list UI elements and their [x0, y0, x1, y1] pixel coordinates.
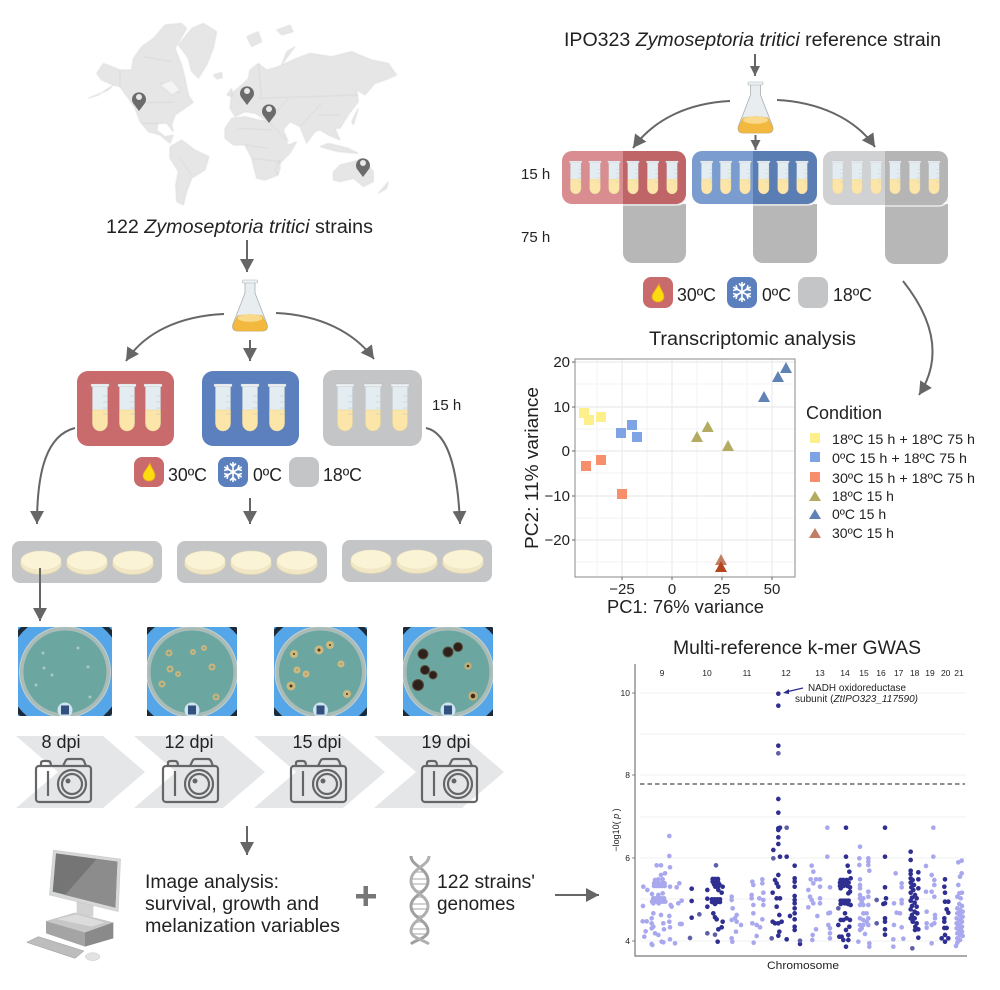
points: orange squares — [581, 455, 627, 499]
points: odd chromosomes — [643, 694, 963, 948]
chart: Manhattan plot: 19 — [925, 668, 935, 678]
chart: PCA scatter: 50 — [764, 581, 780, 598]
legend: PCA conditions: 0ºC 15 h + 18ºC 75 h — [832, 450, 967, 466]
legend: left temperatures — [134, 457, 362, 487]
arrow: reference to flask — [754, 54, 756, 76]
chart: PCA scatter: 10 — [553, 399, 570, 416]
text: image analysis: Image analysis: — [145, 872, 279, 893]
chart: PCA scatter: 25 — [714, 581, 730, 598]
chart: PCA scatter: 20 — [553, 354, 570, 371]
text: genomes — [437, 872, 535, 915]
axis label: chromosome: Chromosome — [767, 960, 839, 972]
panel: plate trays — [12, 540, 492, 583]
legend: right temperatures — [643, 277, 872, 308]
arrows: flask to conditions — [126, 313, 374, 361]
points: yellow squares — [579, 408, 606, 425]
chart: Manhattan plot: 20 — [941, 668, 951, 678]
chart: Manhattan plot: 4 — [625, 936, 630, 946]
icon: DNA helix — [411, 856, 429, 944]
labels: time points — [521, 166, 550, 246]
chart: PCA scatter: 0 — [562, 443, 570, 460]
icon: desktop computer — [27, 850, 121, 961]
panel: 18C time course — [823, 151, 948, 264]
heading: GWAS: Multi-reference k-mer GWAS — [673, 638, 921, 659]
legend: left temperatures: 30ºC — [168, 465, 207, 485]
photo: 8 dpi plate — [18, 627, 112, 716]
text: image analysis: melanization variables — [145, 916, 340, 937]
icon: right flask — [738, 82, 773, 133]
world map — [88, 23, 397, 205]
photo: 19 dpi plate — [403, 627, 493, 716]
label: 15 h: 15 h — [432, 397, 461, 414]
text: genomes: 122 strains' — [437, 872, 535, 893]
chart: Manhattan plot: 10 — [621, 688, 630, 698]
heading: transcriptomic analysis: Transcriptomic analysis — [649, 329, 856, 350]
legend: right temperatures: 30ºC — [677, 285, 716, 305]
legend: right temperatures: 18ºC — [833, 285, 872, 305]
photo: 15 dpi plate — [274, 627, 367, 716]
chart: Manhattan plot: 9 — [660, 668, 665, 678]
chart: PCA scatter — [545, 354, 795, 598]
points: olive triangles — [691, 421, 734, 451]
heading: reference strain: IPO323 Zymoseptoria tritici reference strain — [564, 30, 941, 51]
chart: Manhattan plot: 10 — [702, 668, 712, 678]
legend: left temperatures: 18ºC — [323, 465, 362, 485]
timeline chevrons — [16, 736, 504, 808]
chart: PCA scatter: −25 — [609, 581, 635, 598]
text: image analysis: survival, growth and — [145, 894, 319, 915]
chart: Manhattan plot: 12 — [781, 668, 791, 678]
timepoint labels — [41, 732, 471, 752]
chart: Manhattan plot: 11 — [743, 668, 752, 678]
icon: left flask — [233, 280, 267, 331]
legend: PCA conditions: 18ºC 15 h — [832, 488, 894, 504]
panel: 30C tubes — [77, 371, 174, 446]
chart: Manhattan plot: 13 — [815, 668, 825, 678]
panel: 0C tubes — [202, 371, 299, 446]
chart: PCA scatter: −20 — [545, 532, 570, 549]
heading: 122 strains: 122 Zymoseptoria tritici strains — [106, 217, 373, 238]
chart: Manhattan plot: 14 — [840, 668, 850, 678]
chart: Manhattan plot: 6 — [625, 853, 630, 863]
map pins — [132, 86, 370, 177]
arrows: right flask to conditions — [633, 100, 875, 150]
annotation: NADH oxidoreductase: subunit (ZtIPO323_117590) — [795, 694, 918, 705]
legend: PCA conditions: 18ºC 15 h + 18ºC 75 h — [832, 431, 975, 447]
chart: Manhattan plot: 16 — [876, 668, 886, 678]
annotation: NADH oxidoreductase — [783, 683, 918, 705]
chart: Manhattan plot: 8 — [625, 770, 630, 780]
chart: Manhattan plot: 18 — [910, 668, 920, 678]
legend: left temperatures: 0ºC — [253, 465, 282, 485]
legend: PCA conditions: 30ºC 15 h + 18ºC 75 h — [832, 470, 975, 486]
panel: 0C time course — [692, 151, 817, 263]
legend: PCA conditions: 30ºC 15 h — [832, 525, 894, 541]
photo: 12 dpi plate — [147, 627, 237, 716]
axis label: log10 p: −log10( p ) — [611, 808, 621, 852]
text: genomes: genomes — [437, 894, 515, 915]
labels: time points: 75 h — [521, 229, 550, 246]
timepoint labels: 12 dpi — [164, 732, 214, 752]
text: image analysis — [145, 872, 340, 937]
points: blue squares — [616, 420, 642, 442]
timepoint labels: 19 dpi — [421, 732, 471, 752]
timepoint labels: 8 dpi — [41, 732, 81, 752]
panel: 18C tubes — [323, 370, 422, 446]
legend: PCA conditions: Condition — [806, 403, 882, 423]
panel: 30C time course — [562, 151, 686, 263]
arrow: photos to analysis — [246, 826, 248, 855]
icons: cameras — [36, 759, 477, 802]
arrow: analysis to GWAS — [555, 894, 599, 896]
legend: right temperatures: 0ºC — [762, 285, 791, 305]
arrows: conditions to plates — [37, 428, 460, 524]
chart: Manhattan plot: 17 — [894, 668, 904, 678]
chart: PCA scatter: −10 — [545, 488, 570, 505]
arrow: plate to photos — [39, 568, 41, 621]
axis title: PC2: PC2: 11% variance — [522, 387, 542, 549]
labels: time points: 15 h — [521, 166, 550, 183]
chart: Manhattan plot — [611, 664, 967, 972]
arrow: strains to flask — [246, 240, 248, 272]
chart: PCA scatter: 0 — [668, 581, 676, 598]
points: red triangles — [715, 554, 727, 572]
legend: PCA conditions — [806, 403, 975, 541]
arrow: conditions to PCA — [903, 281, 932, 395]
icon: plus — [356, 886, 376, 906]
annotation: NADH oxidoreductase: NADH oxidoreductase — [808, 683, 906, 694]
legend: PCA conditions: 0ºC 15 h — [832, 506, 886, 522]
axis title: PC1: PC1: 76% variance — [607, 597, 764, 617]
chart: Manhattan plot: 21 — [954, 668, 964, 678]
timepoint labels: 15 dpi — [292, 732, 342, 752]
chart: Manhattan plot: 15 — [859, 668, 869, 678]
points: blue triangles — [758, 362, 792, 402]
